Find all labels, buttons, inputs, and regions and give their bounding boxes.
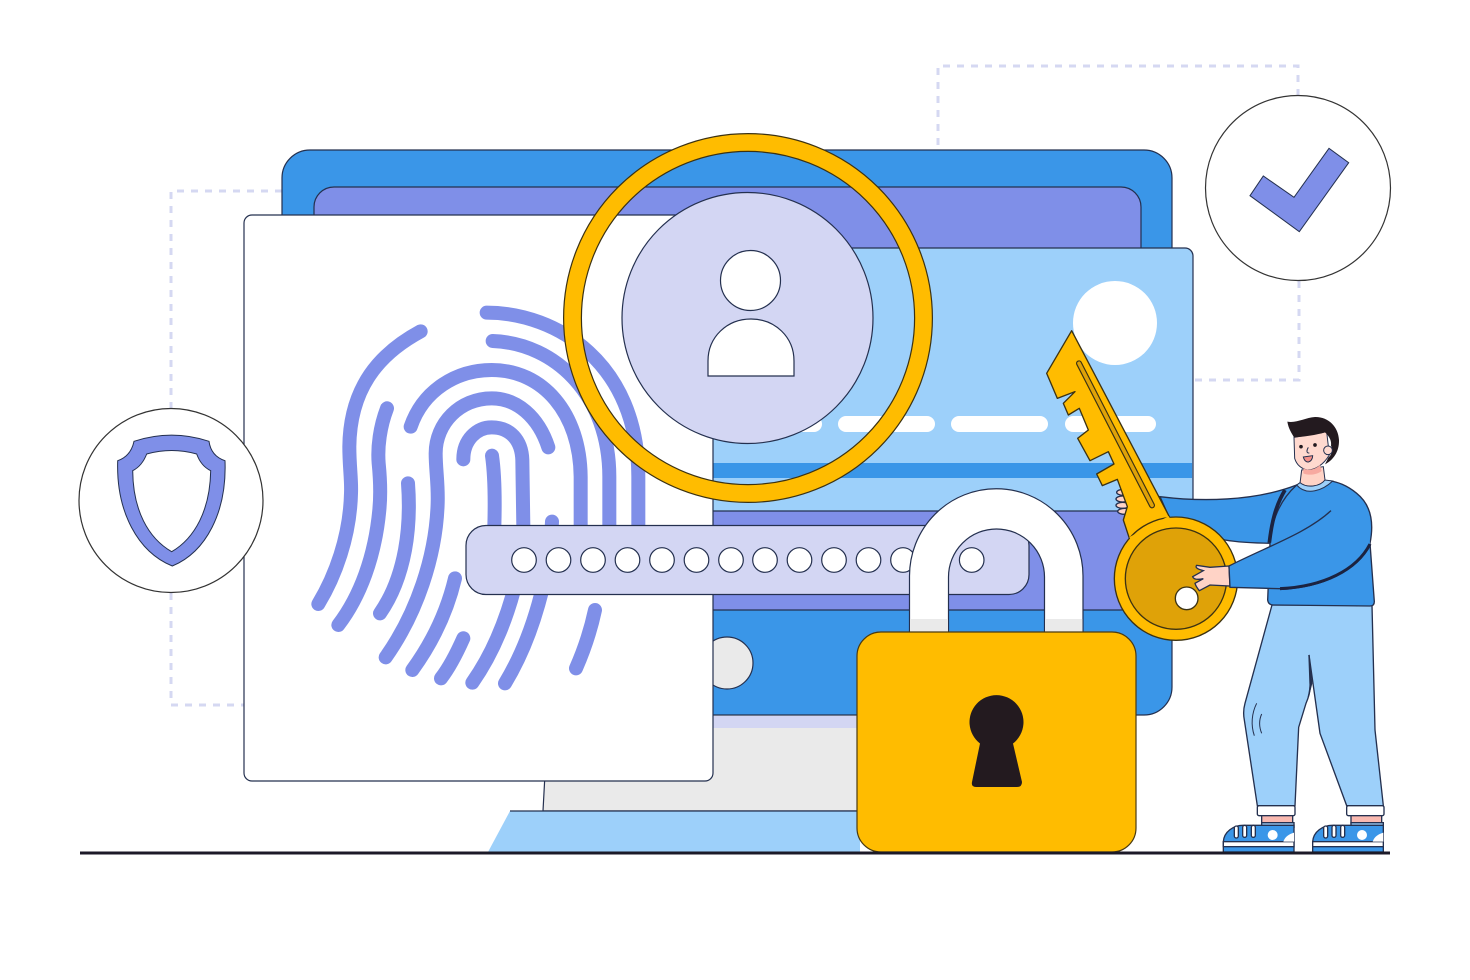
inner purple window	[314, 187, 1141, 610]
icon: fingerprint	[318, 313, 638, 683]
person holding key	[1047, 331, 1384, 852]
monitor	[282, 150, 1193, 852]
right shoe	[1313, 823, 1383, 852]
neck	[1300, 467, 1325, 486]
keyhole	[970, 695, 1024, 787]
icon: golden key	[1047, 331, 1238, 640]
password bar	[466, 526, 1029, 594]
front arm and hand	[1193, 511, 1370, 591]
grey button	[701, 637, 753, 689]
left shoe	[1223, 823, 1294, 852]
credit card panel	[650, 248, 1193, 511]
monitor stand	[488, 700, 860, 852]
collar	[1297, 480, 1333, 491]
icon: check badge	[1206, 96, 1390, 280]
padlock shackle	[910, 489, 1083, 632]
person upper body, behind key	[1116, 467, 1374, 606]
fingerprint panel	[244, 215, 713, 781]
ground line	[80, 852, 1390, 854]
monitor screen	[282, 150, 1172, 715]
icon: shield badge	[79, 408, 263, 592]
icon: padlock	[857, 489, 1136, 852]
icon: magnifier with user	[572, 142, 924, 494]
icon: user	[708, 250, 794, 376]
person legs and shoes	[1223, 605, 1384, 852]
padlock body	[857, 632, 1136, 852]
person head	[1287, 417, 1339, 475]
